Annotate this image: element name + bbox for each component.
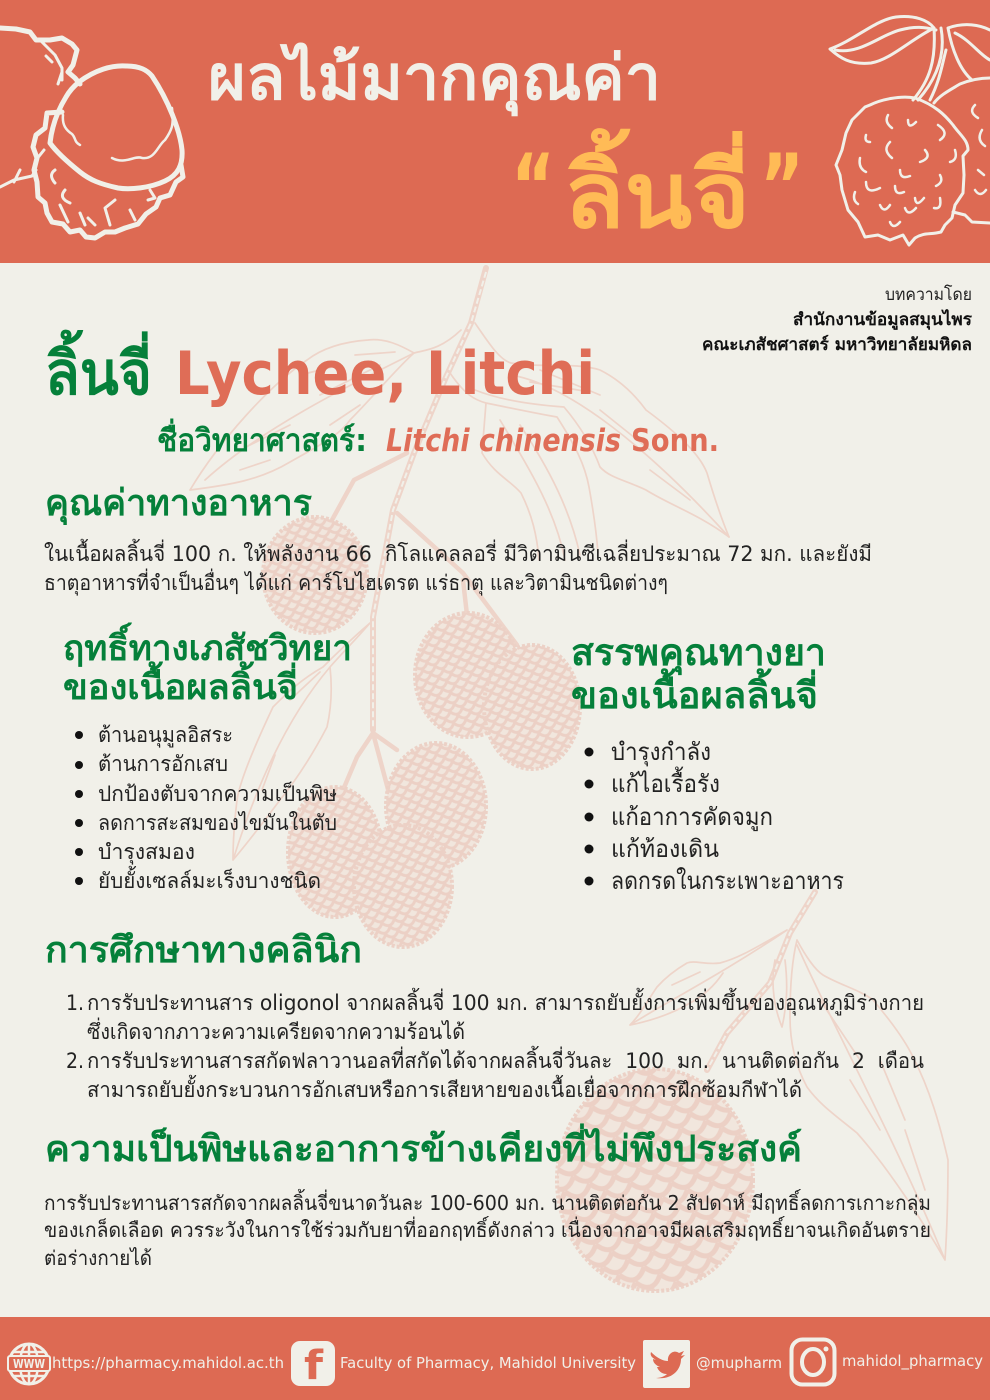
scientific name [157, 418, 719, 459]
twitter handle: @mupharm [696, 1354, 782, 1372]
instagram handle: mahidol_pharmacy [842, 1352, 983, 1371]
icon: peeled lychee (left) [0, 28, 183, 238]
icon: facebook: f [304, 1343, 324, 1389]
panel: medicinal properties: บำรุงกำลัง [611, 738, 711, 767]
section: nutrition [44, 483, 872, 596]
section: toxicity and side effects: ของเกล็ดเลือด ควรระวังในการใช้ร่วมกับยาที่ออกฤทธิ์ดังกล่าว เนื่องจากอาจมีผลเสริมฤทธิ์ยาจนเกิดอันตราย [44, 1215, 931, 1242]
footer band [0, 1317, 990, 1400]
panel: medicinal properties [571, 631, 844, 895]
panel: pharmacological effects: บำรุงสมอง [98, 840, 195, 865]
panel: medicinal properties: สรรพคุณทางยา [571, 631, 826, 676]
section: toxicity and side effects: ต่อร่างกายได้ [44, 1246, 152, 1270]
panel: medicinal properties: แก้ท้องเดิน [611, 835, 719, 863]
header band [0, 0, 990, 263]
panel: medicinal properties: ลดกรดในกระเพาะอาหาร [611, 867, 844, 895]
subtitle: lychee in quotes: ลิ้นจี่ [564, 128, 750, 249]
section: clinical studies: การรับประทานสารสกัดฟลาวานอลที่สกัดได้จากผลลิ้นจี่วันละ 100 มก. นานติดต่อกัน 2 เดือน [87, 1046, 924, 1073]
section: clinical studies: ซึ่งเกิดจากภาวะความเครียดจากความร้อนได้ [87, 1017, 465, 1044]
section: clinical studies: การรับประทานสาร oligonol จากผลลิ้นจี่ 100 มก. สามารถยับยั้งการเพิ่มขึ้นของอุณหภูมิร่างกาย [87, 988, 924, 1016]
section: toxicity and side effects: การรับประทานสารสกัดจากผลลิ้นจี่ขนาดวันละ 100-600 มก. นานติดต่อกัน 2 สัปดาห์ มีฤทธิ์ลดการเกาะกลุ่ม [44, 1188, 931, 1216]
icon: globe: WWW [13, 1357, 45, 1371]
main heading [45, 329, 595, 409]
title: ผลไม้มากคุณค่า [208, 41, 661, 116]
section: nutrition: ธาตุอาหารที่จำเป็นอื่นๆ ได้แก่ คาร์โบไฮเดรต แร่ธาตุ และวิตามินชนิดต่างๆ [44, 568, 668, 596]
panel: pharmacological effects: ของเนื้อผลลิ้นจี่ [63, 661, 298, 708]
section: clinical studies: สามารถยับยั้งกระบวนการอักเสบหรือการเสียหายของเนื้อเยื่อจากการฝึกซ้อมกีฬาได้ [87, 1075, 802, 1102]
website: https://pharmacy.mahidol.ac.th [52, 1354, 284, 1372]
icon: instagram [792, 1340, 834, 1384]
subtitle: lychee in quotes: “ [511, 135, 555, 238]
scientific name: Sonn. [631, 423, 719, 459]
section: clinical studies [45, 930, 924, 1102]
facebook page name: Faculty of Pharmacy, Mahidol University [340, 1354, 636, 1372]
byline: คณะเภสัชศาสตร์ มหาวิทยาลัยมหิดล [702, 334, 972, 355]
panel: pharmacological effects: ต้านอนุมูลอิสระ [98, 723, 233, 748]
section: clinical studies: 2. [66, 1049, 84, 1073]
section: toxicity and side effects: ความเป็นพิษและอาการข้างเคียงที่ไม่พึงประสงค์ [45, 1123, 802, 1170]
byline: สำนักงานข้อมูลสมุนไพร [793, 309, 973, 331]
panel: pharmacological effects: ลดการสะสมของไขมันในตับ [98, 811, 337, 835]
section: clinical studies: 1. [66, 991, 84, 1015]
panel: medicinal properties: ของเนื้อผลลิ้นจี่ [571, 668, 818, 717]
main heading: Lychee, Litchi [175, 339, 595, 409]
section: clinical studies: การศึกษาทางคลินิก [45, 930, 362, 971]
panel: pharmacological effects [63, 622, 352, 893]
icon: lychee fruits with leaves (right) [830, 17, 990, 245]
section: nutrition: ในเนื้อผลลิ้นจี่ 100 ก. ให้พลังงาน 66 กิโลแคลลอรี่ มีวิตามินซีเฉลี่ยประมาณ 72 มก. และยังมี [44, 539, 872, 566]
subtitle: lychee in quotes [511, 128, 804, 249]
main heading: ลิ้นจี่ [45, 329, 152, 409]
panel: medicinal properties: แก้ไอเรื้อรัง [611, 766, 720, 798]
panel: pharmacological effects: ปกป้องตับจากความเป็นพิษ [98, 780, 337, 806]
byline: บทความโดย [885, 284, 972, 305]
scientific name: Litchi chinensis [386, 423, 621, 459]
panel: pharmacological effects: ฤทธิ์ทางเภสัชวิทยา [63, 622, 352, 669]
scientific name: ชื่อวิทยาศาสตร์: [157, 418, 367, 459]
section: nutrition: คุณค่าทางอาหาร [45, 483, 313, 526]
panel: pharmacological effects: ยับยั้งเซลล์มะเร็งบางชนิด [98, 866, 321, 893]
icon: twitter [643, 1340, 690, 1388]
panel: pharmacological effects: ต้านการอักเสบ [98, 752, 228, 776]
subtitle: lychee in quotes: ” [760, 135, 804, 238]
section: toxicity and side effects [44, 1123, 931, 1270]
background illustration: lychee branch [190, 268, 948, 1291]
byline [702, 284, 973, 355]
icon: facebook [291, 1341, 335, 1389]
panel: medicinal properties: แก้อาการคัดจมูก [611, 803, 773, 832]
icon: globe [8, 1344, 50, 1384]
